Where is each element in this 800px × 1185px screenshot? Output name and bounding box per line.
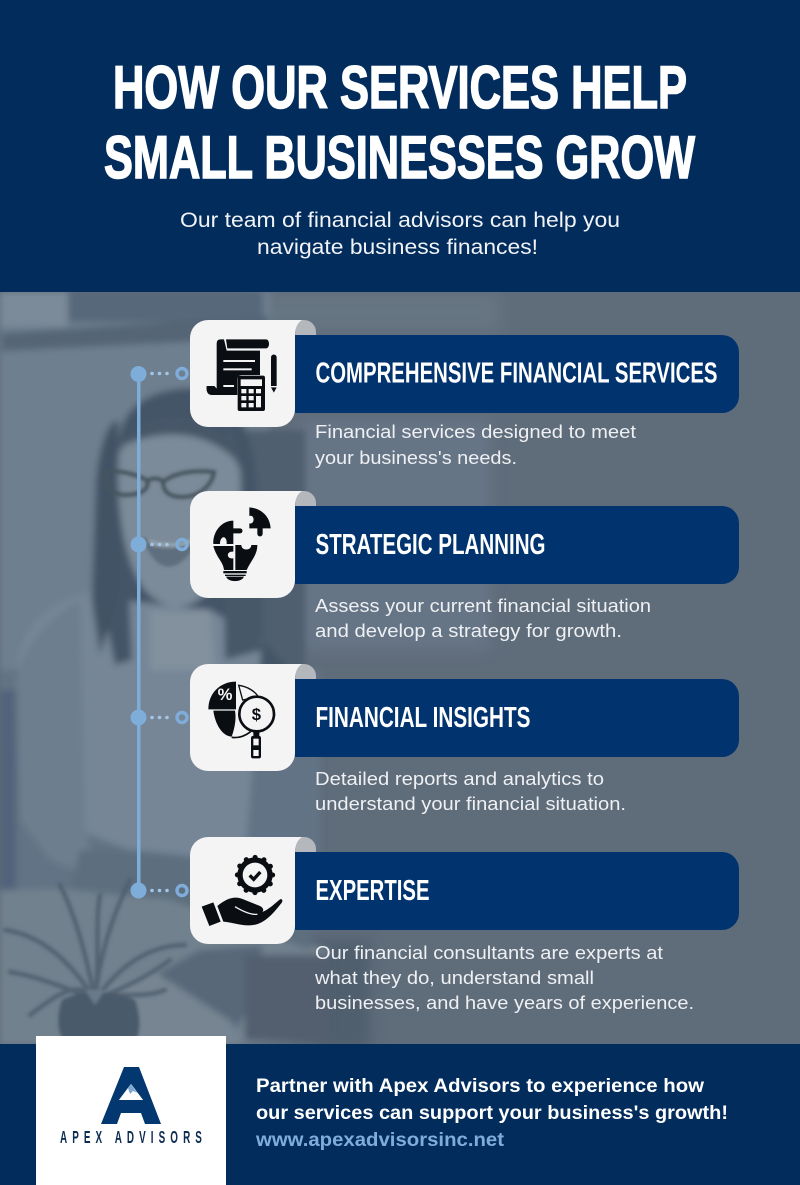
timeline line	[137, 374, 140, 892]
description 3	[315, 768, 626, 814]
heading bar 3: FINANCIAL INSIGHTS	[316, 702, 530, 734]
description 4: Our financial consultants are experts at	[315, 942, 663, 963]
subtitle: navigate business finances!	[257, 236, 538, 259]
description 4: what they do, understand small	[314, 967, 594, 988]
icon: puzzle light bulb	[213, 507, 271, 581]
heading bar 4: EXPERTISE	[316, 875, 430, 907]
description 2	[315, 595, 651, 641]
icon: pie chart and magnifier: $	[252, 705, 262, 724]
icon card 4	[190, 837, 316, 944]
logo mark	[101, 1067, 161, 1124]
subtitle: Our team of financial advisors can help you	[180, 209, 620, 232]
icon card 3	[190, 664, 316, 771]
subtitle	[180, 209, 620, 259]
logo panel	[36, 1036, 226, 1185]
panel: comprehensive financial services	[130, 320, 739, 468]
footer background	[0, 1044, 800, 1185]
heading bar 4	[295, 852, 739, 930]
description 2: and develop a strategy for growth.	[315, 620, 622, 641]
connector 2	[130, 536, 187, 552]
panel: financial insights	[130, 664, 739, 814]
connector 4	[130, 882, 187, 898]
call to action	[255, 1075, 728, 1151]
connector 3	[130, 710, 187, 726]
icon card 1	[190, 320, 316, 427]
heading bar 2	[295, 506, 739, 584]
description 3: Detailed reports and analytics to	[315, 768, 604, 789]
connector 1	[130, 366, 187, 382]
description 1: Financial services designed to meet	[315, 421, 636, 442]
website link: www.apexadvisorsinc.net	[255, 1129, 505, 1151]
icon: pie chart and magnifier	[208, 682, 274, 758]
panel: expertise	[130, 837, 739, 1013]
heading bar 3	[295, 679, 739, 757]
icon: document and calculator	[207, 339, 277, 411]
panel: strategic planning	[130, 491, 739, 641]
description 1	[315, 421, 636, 468]
description 2: Assess your current financial situation	[315, 595, 651, 616]
icon card 2	[190, 491, 316, 598]
logo wordmark: APEX ADVISORS	[60, 1128, 202, 1148]
heading bar 1	[295, 335, 739, 413]
header background	[0, 0, 800, 292]
icon: pie chart and magnifier: %	[218, 685, 233, 704]
description 1: your business's needs.	[315, 447, 517, 468]
call to action: our services can support your business's growth!	[256, 1102, 728, 1124]
description 4	[314, 942, 694, 1013]
icon: hand holding badge	[202, 857, 282, 926]
background photo of advisor	[0, 292, 800, 1050]
description 3: understand your financial situation.	[315, 793, 626, 814]
heading bar 2: STRATEGIC PLANNING	[316, 529, 546, 561]
title	[104, 54, 695, 191]
description 4: businesses, and have years of experience.	[315, 992, 694, 1013]
call to action: Partner with Apex Advisors to experience how	[256, 1075, 705, 1097]
